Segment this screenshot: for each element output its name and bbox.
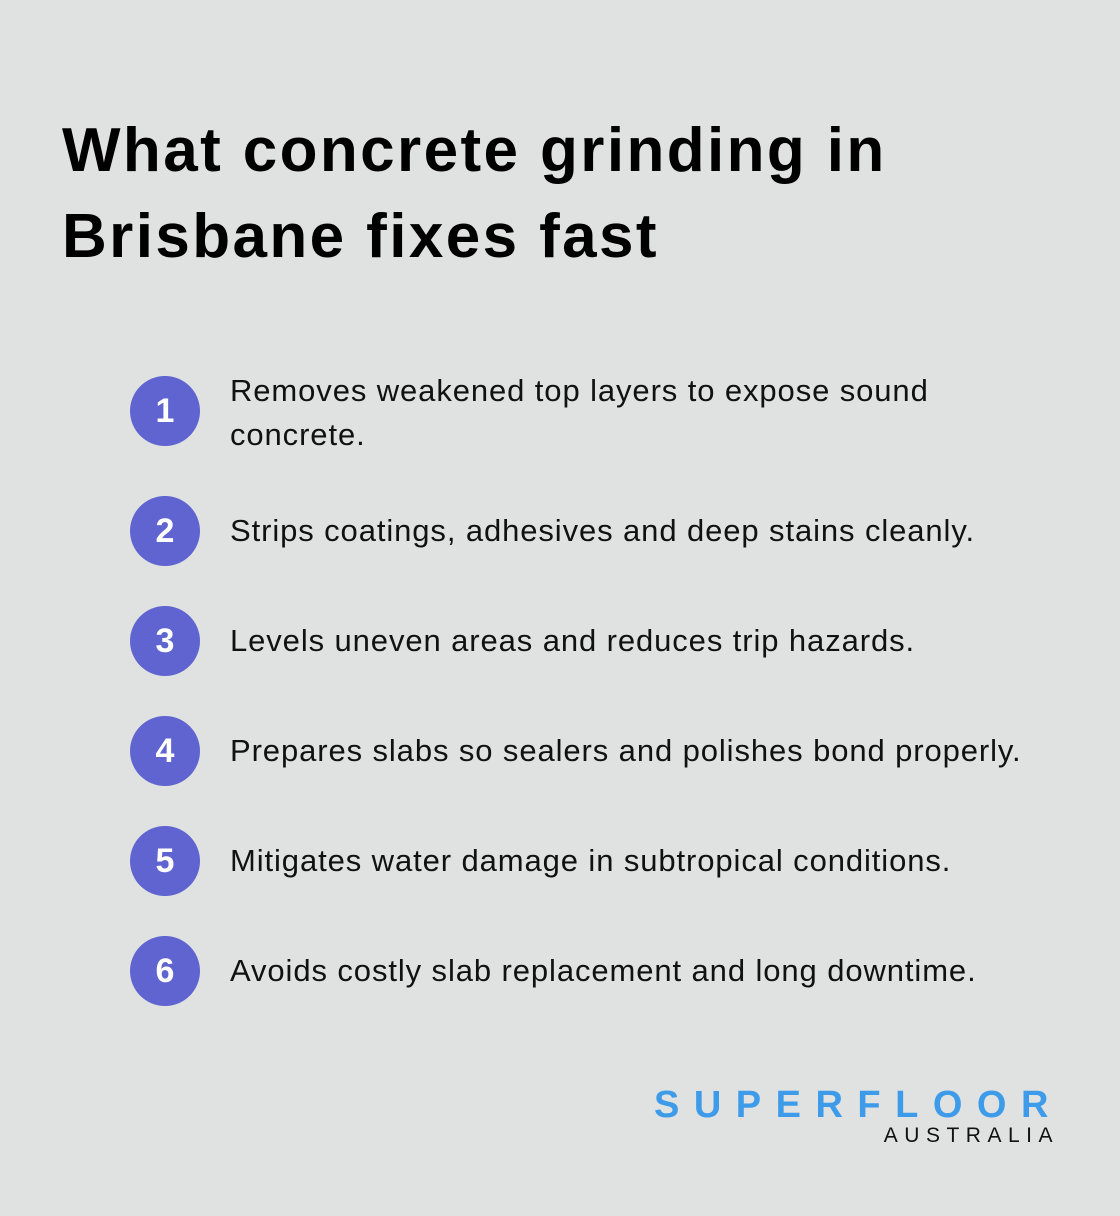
item 3 [130,606,915,676]
text 1: concrete. [230,417,366,452]
badge 6 [130,936,200,1006]
text 5: Mitigates water damage in subtropical conditions. [230,843,951,878]
text 4: Prepares slabs so sealers and polishes bond properly. [230,733,1022,768]
text 1: Removes weakened top layers to expose sound [230,373,929,408]
badge 3 [130,606,200,676]
item 2 [130,496,975,566]
badge 3: 3 [156,622,174,660]
item 1 [130,373,929,452]
text 6: Avoids costly slab replacement and long downtime. [230,953,977,988]
text 1 [230,373,929,452]
badge 2: 2 [156,512,174,550]
text 3: Levels uneven areas and reduces trip hazards. [230,623,915,658]
badge 6: 6 [156,952,174,990]
item 4 [130,716,1022,786]
badge 5 [130,826,200,896]
badge 4: 4 [156,732,174,770]
badge 5: 5 [156,842,174,880]
logo: AUSTRALIA [884,1124,1059,1147]
badge 1: 1 [156,392,174,430]
item 6 [130,936,977,1006]
item 5 [130,826,951,896]
badge 4 [130,716,200,786]
badge 1 [130,376,200,446]
text 2: Strips coatings, adhesives and deep stains cleanly. [230,513,975,548]
logo [654,1084,1063,1147]
logo: SUPERFLOOR [654,1084,1063,1126]
badge 2 [130,496,200,566]
title: What concrete grinding in [62,116,887,185]
title [62,116,887,271]
title: Brisbane fixes fast [62,202,659,271]
